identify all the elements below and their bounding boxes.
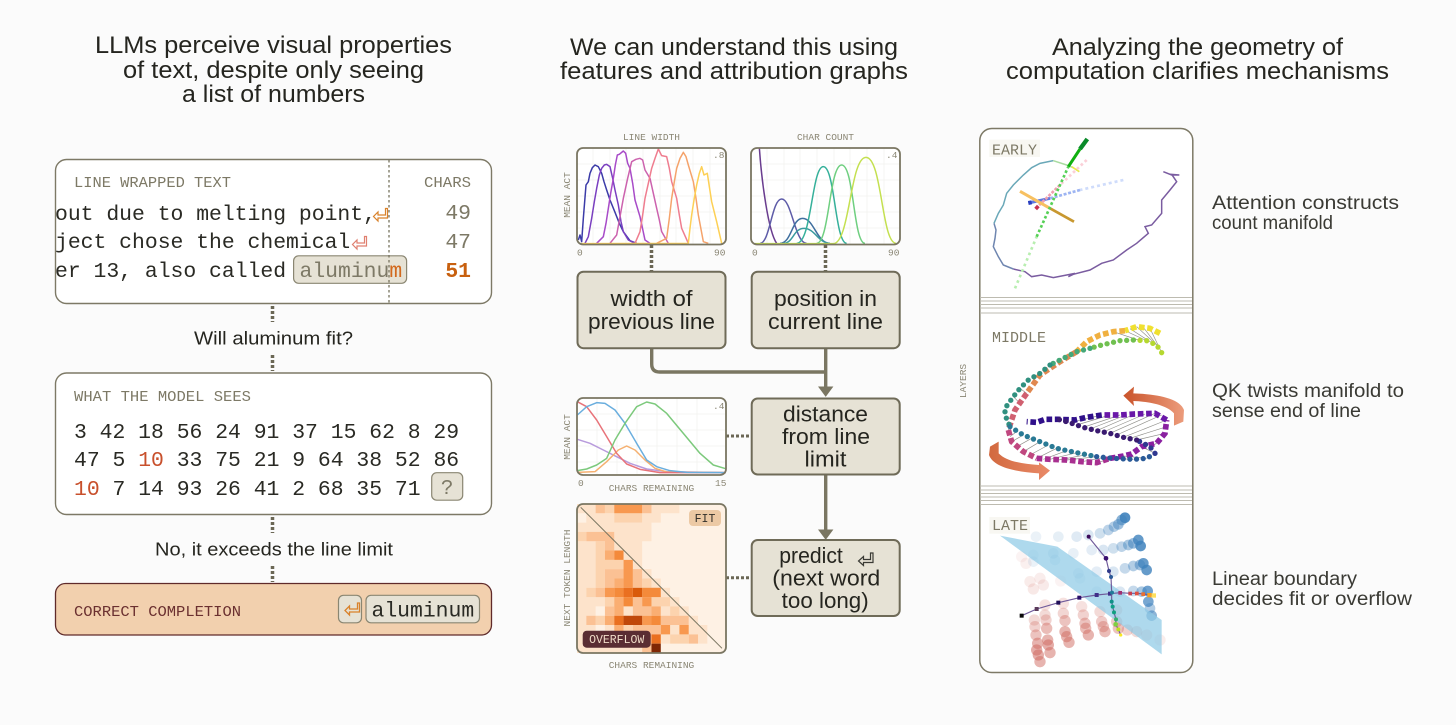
label: correct completion: CORRECT COMPLETION <box>74 604 241 621</box>
connector <box>271 355 274 371</box>
twist arrow lower <box>989 442 1050 480</box>
title: column 3: Analyzing the geometry of <box>1052 34 1343 61</box>
box: distance from line limit: limit <box>804 446 846 472</box>
description: linear boundary: Linear boundary <box>1212 569 1358 590</box>
return key pill <box>338 595 362 623</box>
label: late: LATE <box>992 518 1028 535</box>
box: position in current line <box>752 272 900 348</box>
twist arrow upper <box>1123 387 1184 426</box>
connector: char count chart to box <box>824 245 827 271</box>
box: distance from line limit: from line <box>782 424 870 449</box>
chart: chars remaining curves: .4 <box>713 401 725 412</box>
box: width of previous line: width of <box>609 286 693 311</box>
box: predict newline: too long) <box>782 588 869 613</box>
title: column 1 <box>95 32 452 108</box>
blue dots <box>1028 512 1157 621</box>
chart: chars remaining curves: MEAN ACT <box>562 414 573 460</box>
decision plane <box>1000 536 1162 654</box>
caption: exceeds the line limit: No, it exceeds the line limit <box>155 538 393 560</box>
description: linear boundary: decides fit or overflow <box>1212 589 1412 610</box>
chart: chars remaining curves: 0 <box>578 478 584 489</box>
connector <box>271 566 274 582</box>
box: predict newline: (next word <box>772 566 880 590</box>
trajectory: line width <box>1020 591 1156 618</box>
char counts: 51 <box>445 260 471 284</box>
box: position in current line: position in <box>774 286 877 311</box>
chart: line width: 0 <box>577 248 583 258</box>
token numbers <box>74 421 459 502</box>
text line 3: er 13, also called <box>55 260 286 284</box>
icon: return orange <box>374 208 388 221</box>
label: line wrapped text: LINE WRAPPED TEXT <box>74 175 231 192</box>
chart: char count: 0 <box>752 248 758 258</box>
title: column 1: LLMs perceive visual properties <box>95 32 452 59</box>
description: QK twists: QK twists manifold to <box>1212 381 1404 402</box>
token pill: aluminum: aluminum <box>300 260 402 284</box>
chart: line width: LINE WIDTH <box>623 132 680 143</box>
badge: overflow <box>583 631 651 648</box>
flow arrow: distance to predict <box>819 475 832 539</box>
label: middle: MIDDLE <box>992 330 1046 347</box>
connector <box>271 306 274 322</box>
chart: line width: 90 <box>714 248 726 258</box>
chart: token length heatmap: CHARS REMAINING <box>609 660 695 671</box>
unknown token pill <box>432 473 463 501</box>
chart: char count <box>751 132 900 258</box>
connector: heatmap to box <box>726 576 751 579</box>
label: early: EARLY <box>992 142 1037 160</box>
chart: char count: .4 <box>886 150 898 161</box>
flow arrow: merge into distance <box>652 349 832 396</box>
unknown token pill: ? <box>441 478 454 501</box>
chart: line width: MEAN ACT <box>562 172 573 218</box>
layer dividers <box>980 298 1192 504</box>
title: column 3: computation clarifies mechanisms <box>1006 58 1389 85</box>
chart: chars remaining curves <box>562 398 727 494</box>
label: what the model sees: WHAT THE MODEL SEES <box>74 389 251 406</box>
description: attention: Attention constructs <box>1212 193 1399 214</box>
title: column 1: of text, despite only seeing <box>123 57 424 84</box>
red dots <box>1016 551 1166 667</box>
badge: fit: FIT <box>695 513 715 526</box>
axis label: layers: LAYERS <box>958 364 969 398</box>
token pill: aluminum: aluminum <box>372 600 474 624</box>
description: QK twists <box>1212 381 1404 422</box>
chart: line width <box>562 132 726 258</box>
char counts: 49 <box>445 202 471 226</box>
caption: will aluminum fit: Will aluminum fit? <box>194 328 353 348</box>
chart: token length heatmap <box>562 504 726 671</box>
char counts: 47 <box>445 231 471 255</box>
description: attention <box>1212 193 1399 234</box>
plot: late <box>989 512 1166 667</box>
chart: char count: 90 <box>888 248 900 258</box>
manifold squares <box>1008 327 1167 463</box>
title: column 3 <box>1006 34 1389 85</box>
chart: chars remaining curves: 15 <box>715 478 727 489</box>
title: column 2: features and attribution graphs <box>560 58 908 85</box>
label: chars: CHARS <box>424 175 471 192</box>
icon: return pink <box>352 236 366 249</box>
box: predict newline: predict <box>779 543 843 568</box>
connector: line width chart to box <box>650 245 653 271</box>
chart: token length heatmap: NEXT TOKEN LENGTH <box>562 530 573 626</box>
token numbers: 3 42 18 56 24 91 37 15 62 8 29 <box>74 421 459 445</box>
token numbers: 10 7 14 93 26 41 2 68 35 71 <box>74 478 421 502</box>
connector: distance chart to box <box>726 434 751 438</box>
box: position in current line: current line <box>768 309 883 334</box>
line limit dotted marker <box>388 160 390 303</box>
panel: what the model sees <box>56 373 492 514</box>
panel: correct completion <box>56 584 492 635</box>
title: column 2 <box>560 34 908 85</box>
description: QK twists: sense end of line <box>1212 401 1361 422</box>
badge: fit <box>689 510 721 526</box>
panel: geometry layers <box>980 128 1193 672</box>
title: column 1: a list of numbers <box>182 81 365 108</box>
box: distance from line limit <box>752 398 900 474</box>
box: predict newline <box>752 540 900 616</box>
connector <box>271 517 274 533</box>
description: linear boundary <box>1212 569 1412 610</box>
plot: early <box>989 139 1179 288</box>
description: attention: count manifold <box>1212 213 1333 234</box>
box: distance from line limit: distance <box>783 402 868 426</box>
plot: middle <box>989 327 1184 480</box>
connecting rays <box>1008 327 1167 463</box>
panel: line wrapped text <box>55 160 492 304</box>
trajectory: char count <box>1087 535 1122 637</box>
title: column 2: We can understand this using <box>570 34 898 61</box>
text line 2: ject chose the chemical <box>55 231 350 255</box>
token numbers: 47 5 10 33 75 21 9 64 38 52 86 <box>74 449 459 473</box>
badge: overflow: OVERFLOW <box>589 634 644 647</box>
manifold circles <box>1005 340 1162 459</box>
char counts <box>445 202 471 284</box>
chart: char count: CHAR COUNT <box>797 132 854 143</box>
box: width of previous line: previous line <box>588 309 715 334</box>
text line 1: out due to melting point, <box>55 203 376 227</box>
chart: chars remaining curves: CHARS REMAINING <box>609 483 695 494</box>
chart: line width: .8 <box>713 150 725 161</box>
box: width of previous line <box>578 272 726 348</box>
